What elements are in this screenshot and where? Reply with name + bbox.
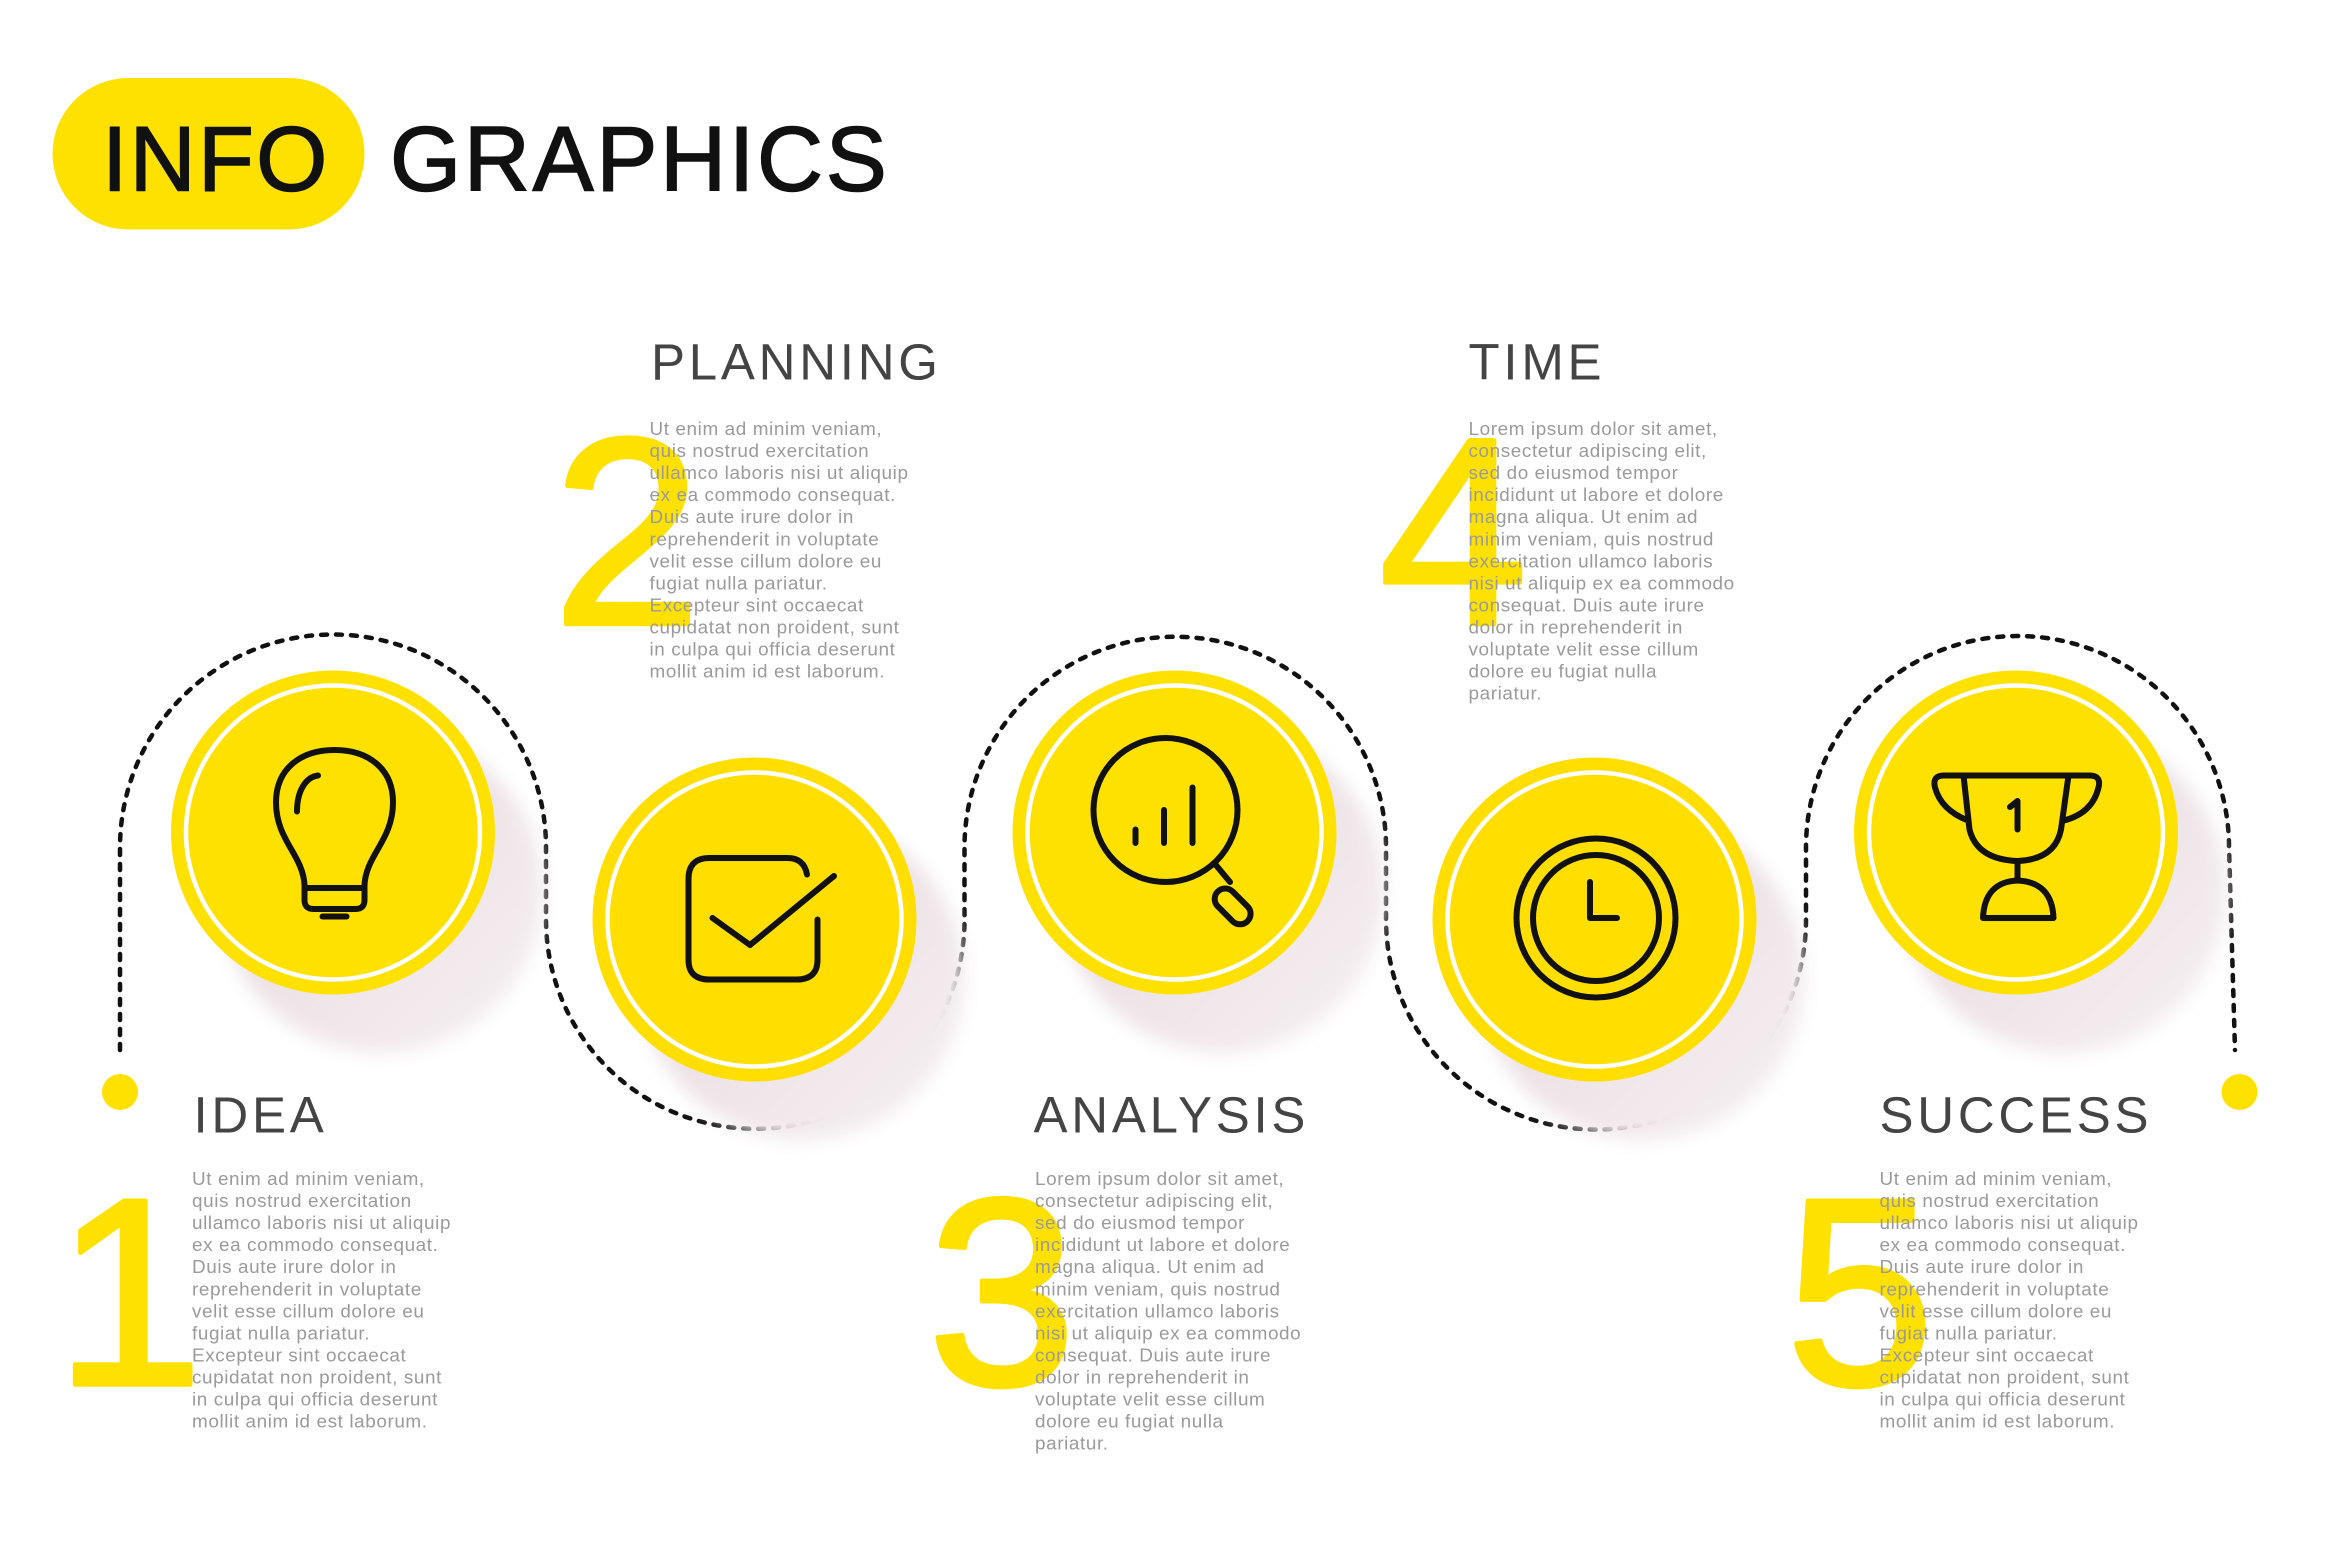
text block: idea: in culpa qui officia deserunt [192, 1390, 438, 1411]
text block: success: cupidatat non proident, sunt [1880, 1367, 2130, 1388]
text block: analysis: consequat. Duis aute irure [1035, 1345, 1271, 1366]
step 3 circle: analysis [1012, 670, 1384, 1053]
text block: planning: mollit anim id est laborum. [650, 662, 885, 683]
text block: planning: Ut enim ad minim veniam, [650, 419, 882, 440]
big numerals [55, 382, 1934, 1442]
title: INFO [102, 109, 330, 211]
text block: planning: cupidatat non proident, sunt [650, 617, 900, 638]
text block: time: pariatur. [1468, 684, 1542, 705]
text block: time: sed do eiusmod tempor [1468, 463, 1679, 484]
text block: planning: ullamco laboris nisi ut aliquip [650, 463, 909, 484]
text block: planning: quis nostrud exercitation [650, 441, 869, 462]
text block: idea: fugiat nulla pariatur. [192, 1323, 370, 1344]
text block: analysis: dolor in reprehenderit in [1035, 1367, 1250, 1388]
text block: idea: ullamco laboris nisi ut aliquip [192, 1213, 451, 1234]
big numerals: 1 [55, 1143, 203, 1442]
text block: idea: velit esse cillum dolore eu [192, 1301, 424, 1322]
text block: success: in culpa qui officia deserunt [1880, 1390, 2126, 1411]
text block: time: minim veniam, quis nostrud [1468, 529, 1714, 550]
headings: IDEA [194, 1087, 328, 1144]
text block: time: voluptate velit esse cillum [1468, 640, 1699, 661]
text block: success: Ut enim ad minim veniam, [1880, 1169, 2112, 1190]
text block: analysis: dolore eu fugiat nulla [1035, 1412, 1224, 1433]
text block: success: Excepteur sint occaecat [1880, 1345, 2094, 1366]
text block: analysis: Lorem ipsum dolor sit amet, [1035, 1169, 1284, 1190]
text block: time: dolore eu fugiat nulla [1468, 662, 1657, 683]
text block: analysis: incididunt ut labore et dolore [1035, 1235, 1290, 1256]
step 4 circle: time [1432, 758, 1804, 1140]
text block: analysis: exercitation ullamco laboris [1035, 1301, 1280, 1322]
headings: TIME [1468, 334, 1605, 391]
big numerals: 5 [1786, 1143, 1934, 1442]
text block: time: exercitation ullamco laboris [1468, 551, 1713, 572]
title [52, 78, 890, 230]
icon: trophy [1934, 776, 2099, 918]
text block: planning: in culpa qui officia deserunt [650, 640, 896, 661]
icon: checkbox [688, 858, 834, 980]
text block: success: velit esse cillum dolore eu [1880, 1301, 2112, 1322]
text block: time: incididunt ut labore et dolore [1468, 485, 1724, 506]
step 1 circle: idea [171, 670, 543, 1053]
text block: planning: Duis aute irure dolor in [650, 507, 854, 528]
text block: planning: Excepteur sint occaecat [650, 595, 864, 616]
icon: lightbulb [276, 750, 393, 916]
text block: success: ullamco laboris nisi ut aliquip [1880, 1213, 2139, 1234]
text block: idea: ex ea commodo consequat. [192, 1235, 438, 1256]
text block: time: nisi ut aliquip ex ea commodo [1468, 573, 1735, 594]
text block: time: consectetur adipiscing elit, [1468, 441, 1707, 462]
step 2 circle: planning [592, 758, 964, 1140]
text block: analysis: pariatur. [1035, 1434, 1109, 1455]
text block: analysis: minim veniam, quis nostrud [1035, 1279, 1281, 1300]
text block: analysis: voluptate velit esse cillum [1035, 1390, 1265, 1411]
headings [194, 334, 2152, 1144]
text block: planning: ex ea commodo consequat. [650, 485, 896, 506]
text block: success: Duis aute irure dolor in [1880, 1257, 2084, 1278]
text block: success: fugiat nulla pariatur. [1880, 1323, 2058, 1344]
headings: PLANNING [651, 334, 942, 391]
text block: idea: reprehenderit in voluptate [192, 1279, 422, 1300]
text block: time: magna aliqua. Ut enim ad [1468, 507, 1698, 528]
text block: planning: reprehenderit in voluptate [650, 529, 879, 550]
step 5 circle: success [1854, 670, 2226, 1053]
text block: time: Lorem ipsum dolor sit amet, [1468, 419, 1718, 440]
text block: idea: Duis aute irure dolor in [192, 1257, 396, 1278]
text block: planning: fugiat nulla pariatur. [650, 573, 828, 594]
text block: idea: cupidatat non proident, sunt [192, 1367, 442, 1388]
text block: idea: mollit anim id est laborum. [192, 1412, 428, 1433]
big numerals: 3 [928, 1143, 1076, 1442]
text block: analysis: nisi ut aliquip ex ea commodo [1035, 1323, 1301, 1344]
text block: idea: Excepteur sint occaecat [192, 1345, 407, 1366]
headings: ANALYSIS [1034, 1087, 1309, 1144]
text block: success: ex ea commodo consequat. [1880, 1235, 2126, 1256]
text block: planning: velit esse cillum dolore eu [650, 551, 882, 572]
text block: idea: Ut enim ad minim veniam, [192, 1169, 425, 1190]
text block: success: mollit anim id est laborum. [1880, 1412, 2115, 1433]
text block: analysis: magna aliqua. Ut enim ad [1035, 1257, 1265, 1278]
text block: time: consequat. Duis aute irure [1468, 595, 1705, 616]
icon: clock [1516, 838, 1676, 998]
start dot [102, 1074, 138, 1110]
text block: analysis: sed do eiusmod tempor [1035, 1213, 1245, 1234]
icon: magnifier chart [1094, 738, 1255, 929]
text block: idea: quis nostrud exercitation [192, 1191, 412, 1212]
dashed connector path [120, 634, 2235, 1130]
big numerals: 4 [1379, 382, 1528, 681]
title: GRAPHICS [390, 109, 890, 211]
text block: time: dolor in reprehenderit in [1468, 617, 1683, 638]
text block: success: reprehenderit in voluptate [1880, 1279, 2109, 1300]
text block: analysis: consectetur adipiscing elit, [1035, 1191, 1273, 1212]
text block: success: quis nostrud exercitation [1880, 1191, 2099, 1212]
end dot [2222, 1074, 2258, 1110]
big numerals: 2 [553, 382, 701, 681]
headings: SUCCESS [1880, 1087, 2152, 1144]
